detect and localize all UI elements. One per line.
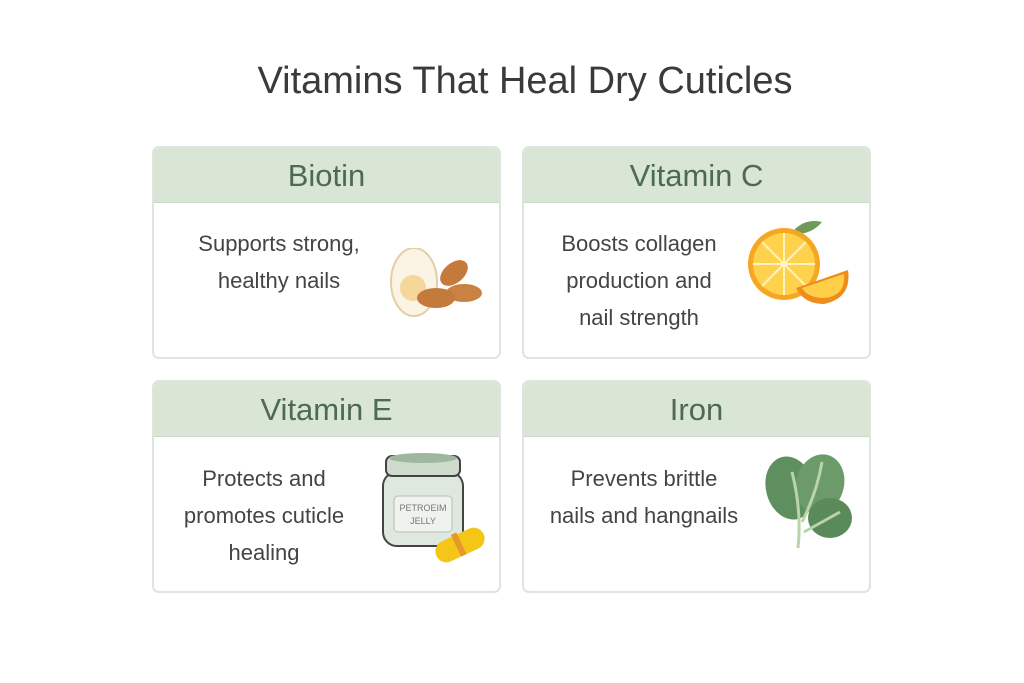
text: vitamin e: promotes cuticle bbox=[184, 503, 344, 528]
icon: jar and capsule: JELLY bbox=[410, 516, 436, 526]
icon: jar and capsule: PETROEIM bbox=[399, 503, 447, 513]
text: vitamin c: production and bbox=[566, 268, 712, 293]
icon: spinach bbox=[765, 454, 852, 548]
text: vitamin c: Boosts collagen bbox=[561, 231, 717, 256]
heading: iron: Iron bbox=[670, 392, 723, 427]
text: vitamin e: healing bbox=[229, 540, 299, 565]
text: biotin: healthy nails bbox=[218, 268, 340, 293]
icon: egg and almonds bbox=[390, 248, 482, 317]
heading: vitamin c bbox=[524, 148, 869, 203]
heading: biotin: Biotin bbox=[288, 158, 365, 193]
panel: vitamin c bbox=[522, 146, 871, 359]
heading: vitamin c: Vitamin C bbox=[630, 158, 763, 193]
text: biotin bbox=[198, 231, 360, 293]
text: vitamin c bbox=[561, 231, 717, 330]
panel: vitamin e bbox=[152, 380, 501, 593]
title: Vitamins That Heal Dry Cuticles bbox=[257, 60, 792, 102]
text: vitamin e: Protects and bbox=[202, 466, 326, 491]
heading: iron bbox=[524, 382, 869, 437]
icon: jar and capsule bbox=[382, 453, 485, 562]
panel: iron bbox=[522, 380, 871, 593]
text: iron bbox=[550, 466, 738, 528]
text: vitamin c: nail strength bbox=[579, 305, 699, 330]
icon: orange bbox=[748, 221, 848, 304]
heading: biotin bbox=[154, 148, 499, 203]
text: vitamin e bbox=[184, 466, 344, 565]
text: iron: nails and hangnails bbox=[550, 503, 738, 528]
panel: biotin bbox=[152, 146, 501, 359]
text: iron: Prevents brittle bbox=[571, 466, 717, 491]
text: biotin: Supports strong, bbox=[198, 231, 360, 256]
heading: vitamin e: Vitamin E bbox=[260, 392, 393, 427]
heading: vitamin e bbox=[154, 382, 499, 437]
